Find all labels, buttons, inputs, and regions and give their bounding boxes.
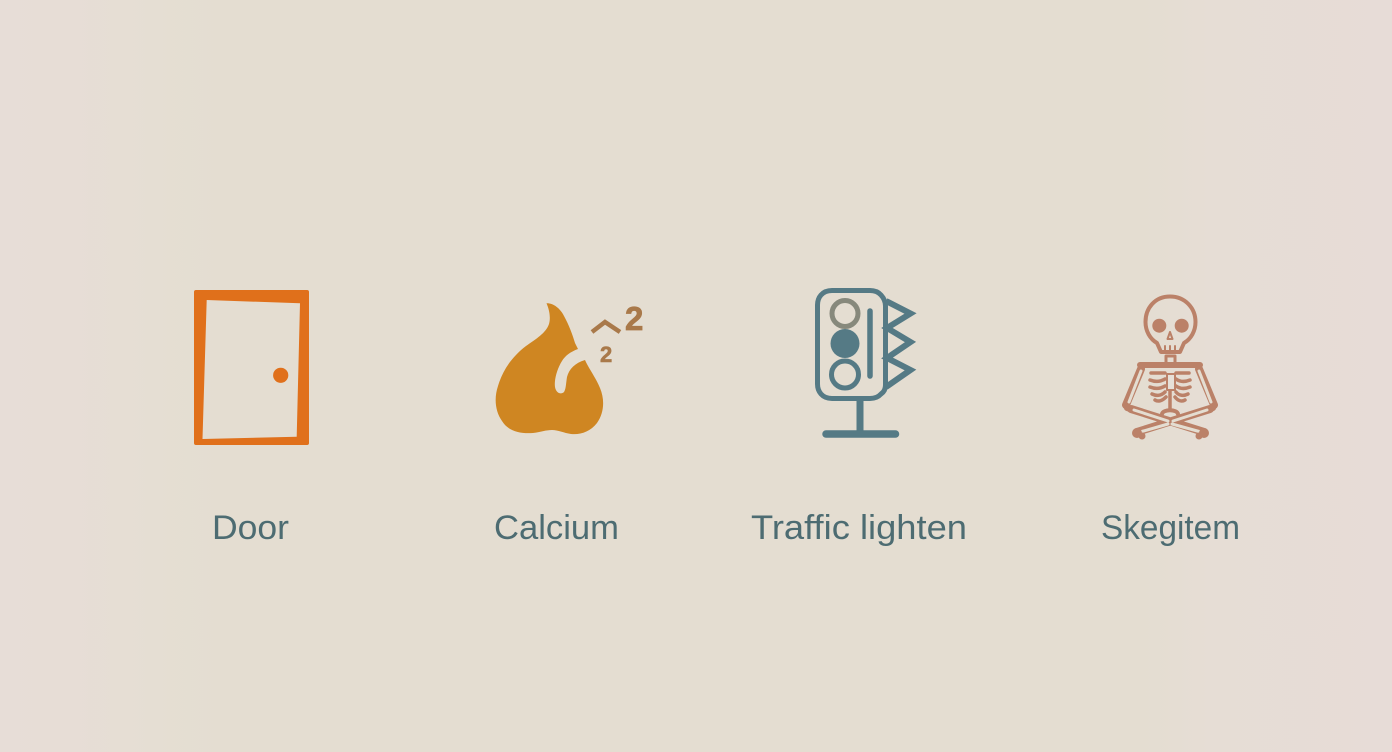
icon: traffic light <box>818 290 910 434</box>
superscript caret and numerals: 2 <box>600 342 612 367</box>
sternum <box>1167 374 1175 390</box>
superscript caret and numerals: 2 <box>625 300 643 337</box>
superscript caret and numerals <box>592 300 643 367</box>
spine and pelvis <box>1168 391 1172 409</box>
icon: seated skeleton <box>1126 296 1214 440</box>
ribs <box>1150 373 1190 401</box>
arms and legs as hollow bones <box>1126 365 1214 432</box>
icon: door <box>194 290 309 445</box>
label: Skegitem: Skegitem <box>1101 509 1240 547</box>
label: Traffic lighten: Traffic lighten <box>751 509 967 547</box>
skull <box>1146 296 1196 352</box>
label: Calcium: Calcium <box>494 509 619 547</box>
label: Door: Door <box>212 509 289 547</box>
neck <box>1166 356 1175 366</box>
icon: calcium flame <box>496 300 643 434</box>
foot ends <box>1132 428 1142 438</box>
